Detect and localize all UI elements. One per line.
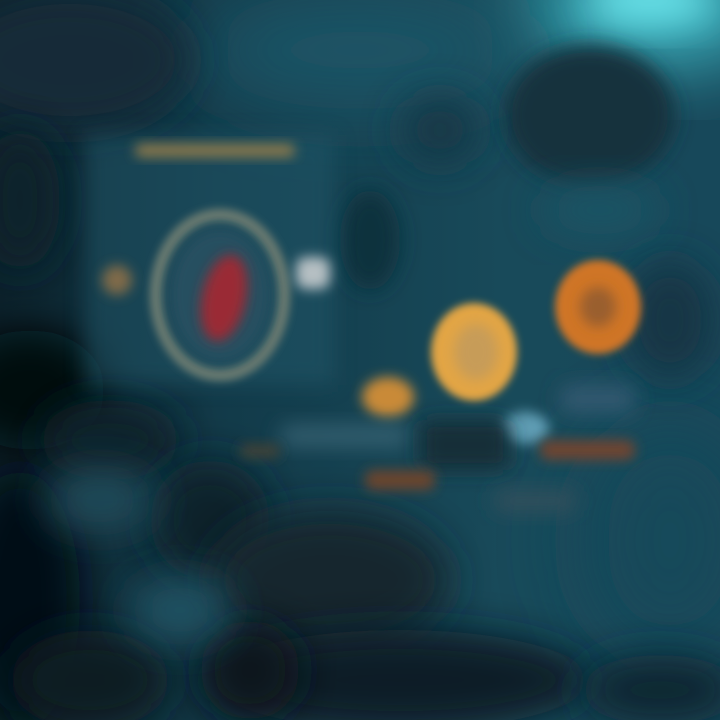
icon: yellow coin	[431, 303, 517, 401]
icon: small white badge	[296, 257, 330, 289]
icon: orange coin	[555, 260, 641, 354]
lower labels	[240, 385, 635, 512]
icon: red gauge ring	[156, 215, 284, 375]
icon: small amber pill	[362, 377, 414, 417]
icon: small orange dot	[102, 265, 132, 295]
panel: left card	[85, 135, 335, 385]
heading	[135, 144, 295, 157]
